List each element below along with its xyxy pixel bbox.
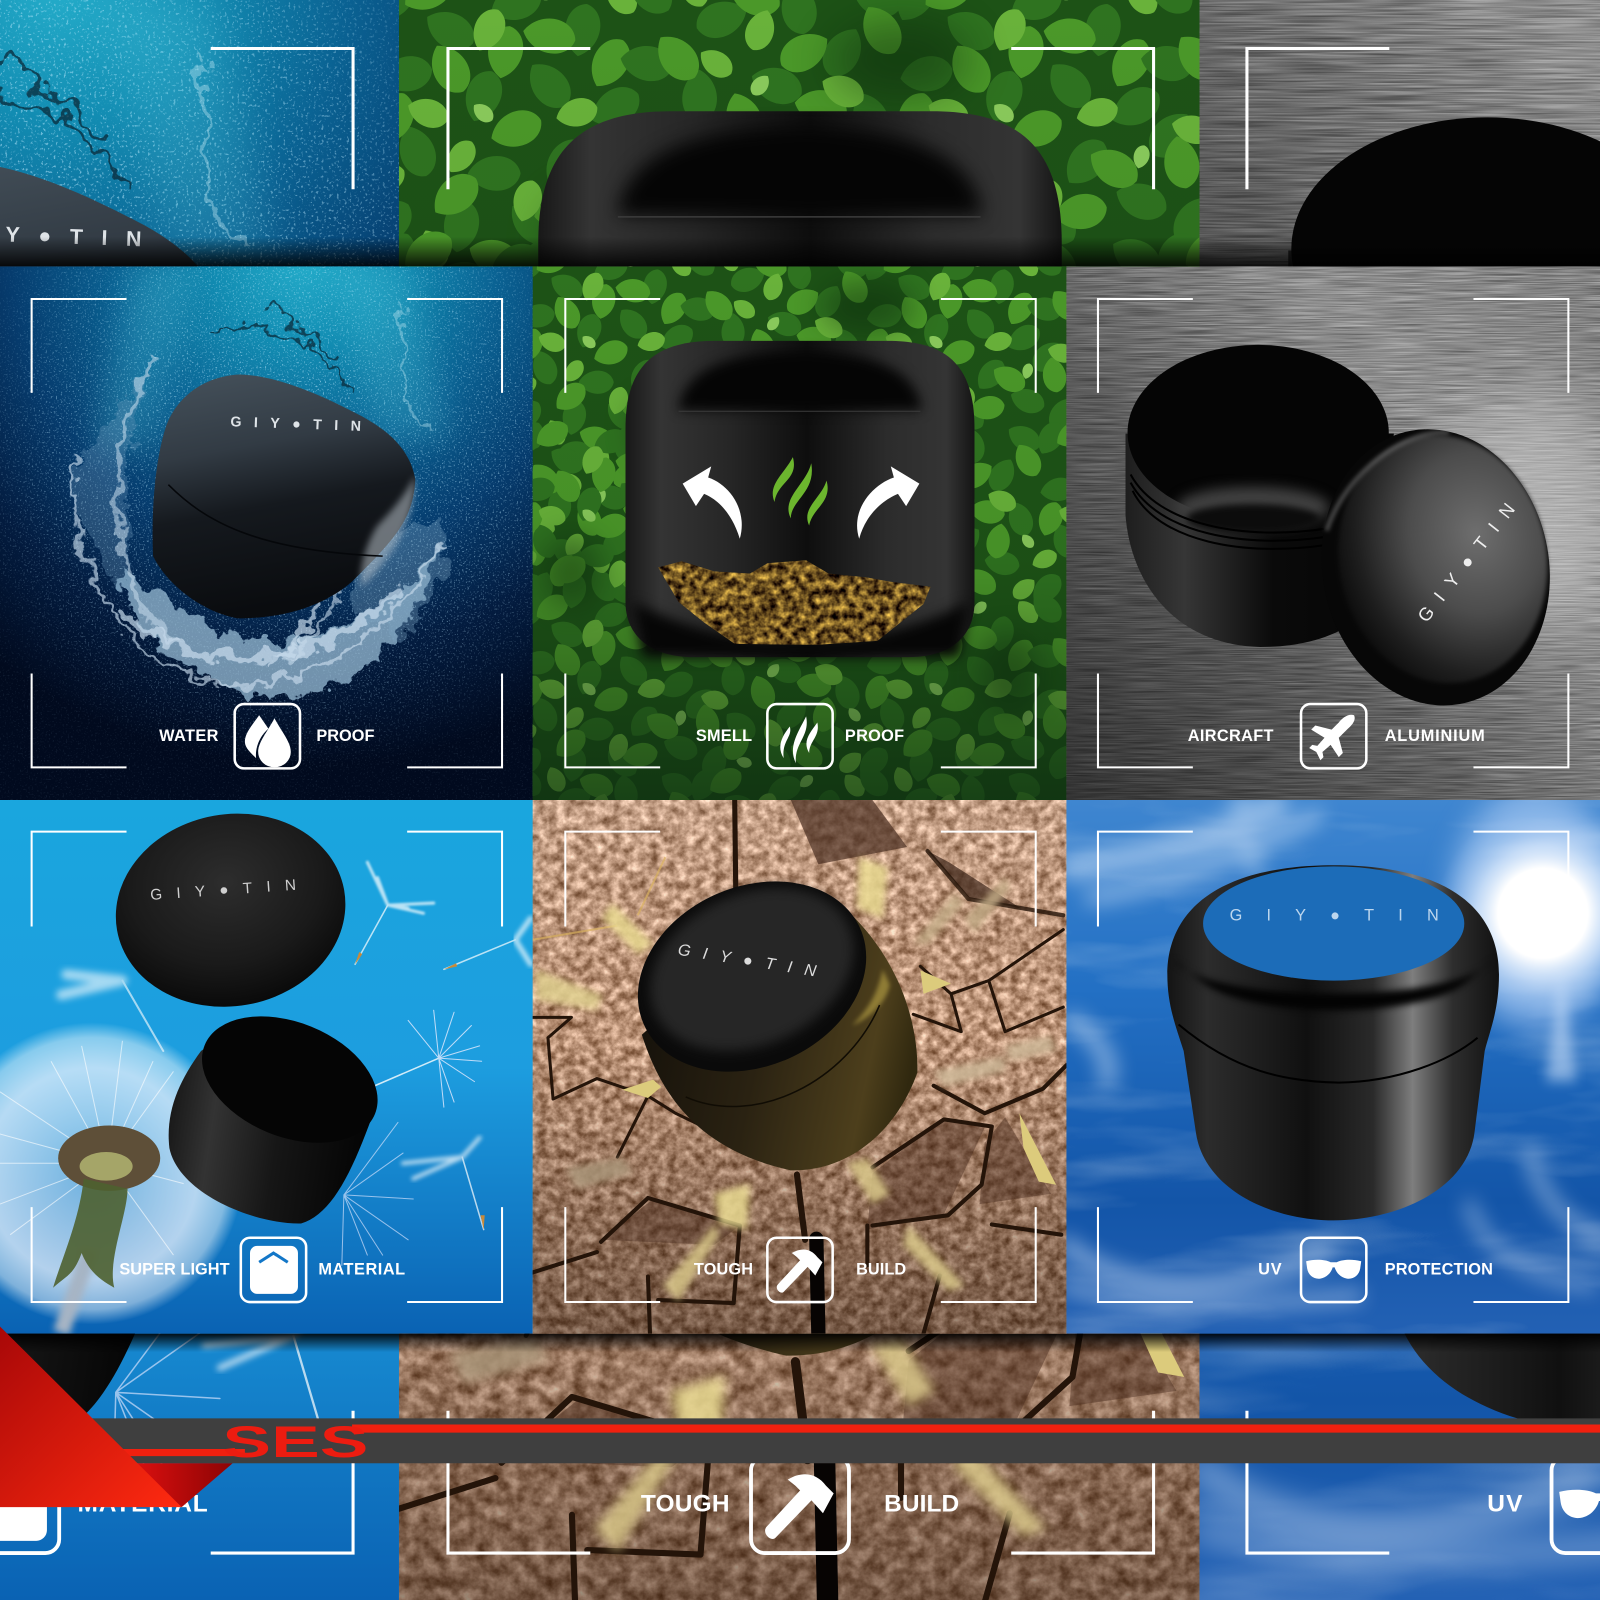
seed lower right [403,1138,484,1230]
panel: UV protection [1066,786,1600,1334]
label: PROOF: PROOF [845,727,904,745]
green smell wisps [773,457,828,526]
label: SUPER LIGHT: SUPER LIGHT [119,1260,230,1278]
red stripes [112,1424,1600,1456]
seed soft left [61,974,163,1051]
label: PROOF: PROOF [316,727,375,745]
label: UV: UV [1258,1260,1282,1278]
jar brand: GIY●TIN [230,414,361,435]
icon: water drops [235,704,300,768]
seed behind jar [342,1122,413,1265]
frame brackets [1098,299,1568,767]
jar with see-through contents [626,341,974,657]
arrow: left [683,466,742,539]
jar lid with brand [100,796,361,1025]
seed far right [444,918,531,969]
cracks [533,800,1066,1334]
icon: sunglasses [1301,1238,1366,1302]
panel: super light material [0,796,534,1334]
frame brackets [565,299,1036,767]
cannabis buds [658,560,930,645]
label: WATER: WATER [159,727,219,745]
seed mid right [372,1010,482,1107]
label: AIRCRAFT: AIRCRAFT [1188,727,1274,745]
floating seeds [61,862,531,1265]
panel: water proof [0,266,534,800]
open jar base [1126,345,1394,647]
icon: smell waves [767,704,833,768]
foliage [505,240,1222,957]
water splash [71,301,449,698]
jar lid with brand [1300,411,1571,724]
flying debris [536,857,1056,1301]
jar tilted on stone: GIY●TIN [677,941,818,980]
open jar base [169,992,396,1223]
panel: smell proof [505,240,1222,957]
icon: plane [1301,704,1366,768]
dandelion [0,1022,243,1333]
frame brackets [1098,832,1568,1302]
jar lid with brand: GIY●TIN [150,877,297,904]
arrow: right [857,466,919,539]
panel: tough build [533,800,1067,1334]
label: TOUGH: TOUGH [694,1260,753,1278]
logo: SES: SES [222,1416,368,1467]
jar with blue lid [1167,865,1499,1220]
icon: weight scale [241,1238,306,1302]
six panel feature grid [0,240,1600,1334]
frame brackets [32,832,502,1302]
label: SMELL: SMELL [696,727,752,745]
panel: aircraft aluminium [1066,266,1600,800]
jar tumbling in water [153,374,415,618]
frame brackets [565,832,1036,1302]
label: BUILD: BUILD [856,1260,906,1278]
jar lid with brand: GIY●TIN [1413,499,1519,626]
label: MATERIAL: MATERIAL [318,1260,405,1278]
seed top right [355,862,434,964]
jar tilted on stone [607,846,917,1170]
jar with blue lid: GIY●TIN [1230,906,1439,924]
icon: hammer [767,1238,833,1302]
sun [1436,786,1600,1082]
brand band [0,1416,1600,1467]
red corner triangles [0,1327,233,1507]
label: PROTECTION: PROTECTION [1385,1260,1493,1278]
label: ALUMINIUM: ALUMINIUM [1385,727,1485,745]
frame brackets [32,299,502,767]
strip shadows [0,237,1600,1352]
